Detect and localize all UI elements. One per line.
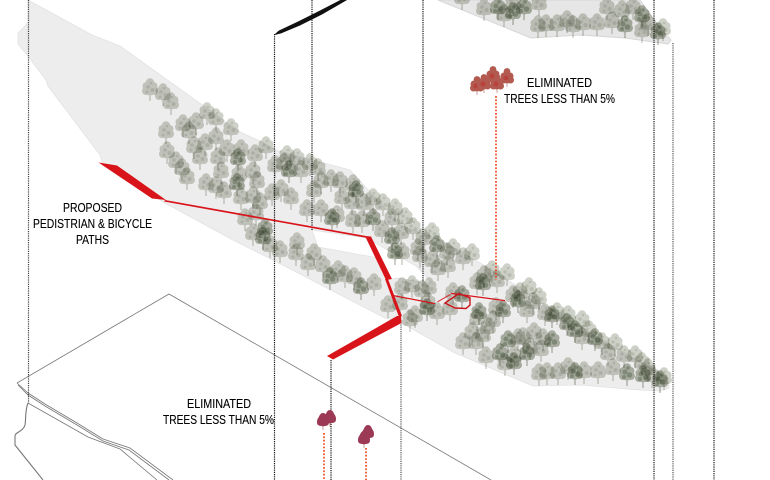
ground: main terrace — [18, 0, 669, 391]
ground: upper terrace — [438, 0, 671, 44]
label: eliminated trees upper: TREES LESS THAN 5% — [504, 92, 615, 106]
label: proposed paths: PROPOSED — [63, 201, 122, 215]
upper terrace trees — [454, 0, 671, 45]
eliminated trees cluster: lower — [317, 410, 374, 448]
label: eliminated trees lower: ELIMINATED — [187, 397, 251, 411]
red path loop — [445, 294, 470, 308]
label: eliminated trees lower — [163, 397, 274, 427]
label: eliminated trees lower: TREES LESS THAN 5% — [163, 413, 274, 427]
ground: lower site outline — [15, 294, 491, 480]
label: proposed paths: PEDISTRIAN & BICYCLE — [33, 217, 152, 231]
eliminated trees cluster: upper — [470, 66, 514, 95]
orange dotted leader lines — [324, 96, 496, 480]
label: proposed paths: PATHS — [76, 233, 109, 247]
red proposed pedestrian and bicycle paths — [98, 162, 505, 360]
main terrace trees — [142, 78, 672, 393]
label: eliminated trees upper: ELIMINATED — [527, 76, 592, 90]
black path segment — [275, 0, 348, 34]
label: eliminated trees upper — [504, 76, 615, 106]
label: proposed paths — [33, 201, 152, 247]
